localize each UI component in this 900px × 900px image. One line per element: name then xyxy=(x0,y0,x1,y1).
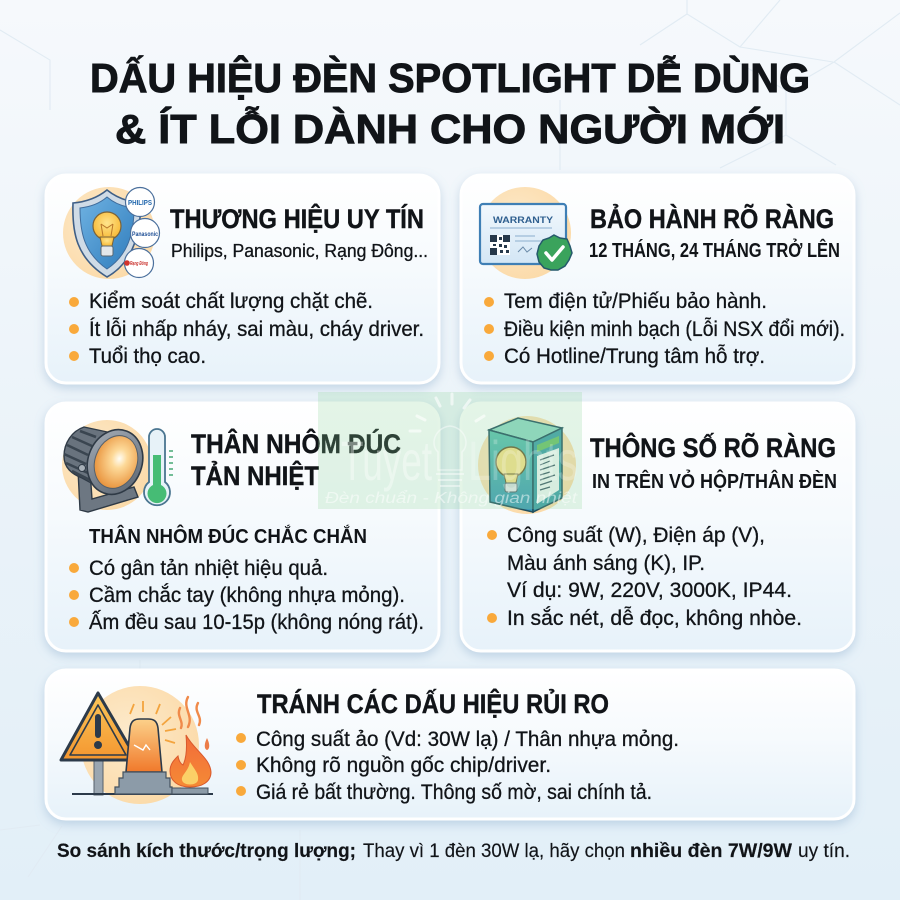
heading xyxy=(191,429,401,491)
title xyxy=(90,55,810,152)
bullet list: Tuổi thọ cao. xyxy=(89,344,206,368)
bullet list: Có gân tản nhiệt hiệu quả. xyxy=(89,556,328,580)
heading: BẢO HÀNH RÕ RÀNG xyxy=(590,204,834,234)
bullet list: Ví dụ: 9W, 220V, 3000K, IP44. xyxy=(507,578,792,602)
badge: Philips: PHILIPS xyxy=(128,200,152,207)
footer note: nhiều đèn 7W/9W xyxy=(630,841,792,862)
watermark xyxy=(318,392,582,509)
footer note: uy tín. xyxy=(798,841,850,862)
subheading: IN TRÊN VỎ HỘP/THÂN ĐÈN xyxy=(592,469,837,493)
watermark: Lights xyxy=(468,429,578,492)
panel: tránh các dấu hiệu rủi ro xyxy=(46,670,854,819)
icon: spotlight and thermometer xyxy=(62,420,173,512)
panel: thương hiệu uy tín xyxy=(46,175,439,383)
bullet list xyxy=(487,523,802,630)
subheading: THÂN NHÔM ĐÚC CHẮC CHẮN xyxy=(89,524,367,548)
panel: thông số rõ ràng xyxy=(461,403,854,651)
footer note: So sánh kích thước/trọng lượng; xyxy=(57,841,356,862)
bullet list xyxy=(236,727,679,804)
bullet list: Tem điện tử/Phiếu bảo hành. xyxy=(504,289,767,313)
badge: Panasonic: Panasonic xyxy=(132,232,159,238)
bullet list: Không rõ nguồn gốc chip/driver. xyxy=(256,753,551,777)
bullet list xyxy=(69,556,424,634)
badge: Rạng Đông: Rạng Đông xyxy=(130,261,148,267)
bullet list: Có Hotline/Trung tâm hỗ trợ. xyxy=(504,343,765,368)
panel: thân nhôm đúc tản nhiệt xyxy=(46,403,439,651)
bullet list: Kiểm soát chất lượng chặt chẽ. xyxy=(89,289,373,313)
footer note xyxy=(57,841,850,862)
bullet list xyxy=(484,289,845,368)
bullet list: Cầm chắc tay (không nhựa mỏng). xyxy=(89,582,405,607)
bullet list: Công suất ảo (Vd: 30W lạ) / Thân nhựa mỏng. xyxy=(256,727,679,751)
bullet list: Màu ánh sáng (K), IP. xyxy=(507,551,705,575)
footer note: Thay vì 1 đèn 30W lạ, hãy chọn xyxy=(363,841,625,862)
bullet list: Ấm đều sau 10-15p (không nóng rát). xyxy=(89,609,424,634)
bullet list: In sắc nét, dễ đọc, không nhòe. xyxy=(507,605,802,630)
icon: product box with bulb xyxy=(478,416,576,514)
panel: bảo hành rõ ràng xyxy=(461,175,854,383)
title: DẤU HIỆU ĐÈN SPOTLIGHT DỄ DÙNG xyxy=(90,55,810,101)
watermark: Đèn chuẩn - Không gian nhiệt xyxy=(325,490,578,507)
heading: TRÁNH CÁC DẤU HIỆU RỦI RO xyxy=(257,689,609,719)
icon: warranty card with check badge xyxy=(479,187,572,279)
bullet list: Điều kiện minh bạch (Lỗi NSX đổi mới). xyxy=(504,316,845,341)
heading: THÂN NHÔM ĐÚC xyxy=(191,429,401,459)
watermark: Tuyet xyxy=(341,429,432,492)
heading: THÔNG SỐ RÕ RÀNG xyxy=(590,433,836,463)
bullet list xyxy=(69,289,424,368)
subheading: 12 THÁNG, 24 THÁNG TRỞ LÊN xyxy=(589,238,840,262)
icon: warning sign, beacon and fire xyxy=(61,686,213,804)
bullet list: Công suất (W), Điện áp (V), xyxy=(507,523,765,547)
bullet list: Ít lỗi nhấp nháy, sai màu, cháy driver. xyxy=(89,316,424,341)
subheading: Philips, Panasonic, Rạng Đông... xyxy=(171,240,428,261)
heading: THƯƠNG HIỆU UY TÍN xyxy=(170,204,424,234)
icon: warranty card with check badge: WARRANTY xyxy=(493,215,554,226)
icon: shield with bulb and brand badges xyxy=(63,187,160,279)
heading: TẢN NHIỆT xyxy=(191,461,319,491)
title: & ÍT LỖI DÀNH CHO NGƯỜI MỚI xyxy=(115,106,785,152)
bullet list: Giá rẻ bất thường. Thông số mờ, sai chính tả. xyxy=(256,780,652,804)
